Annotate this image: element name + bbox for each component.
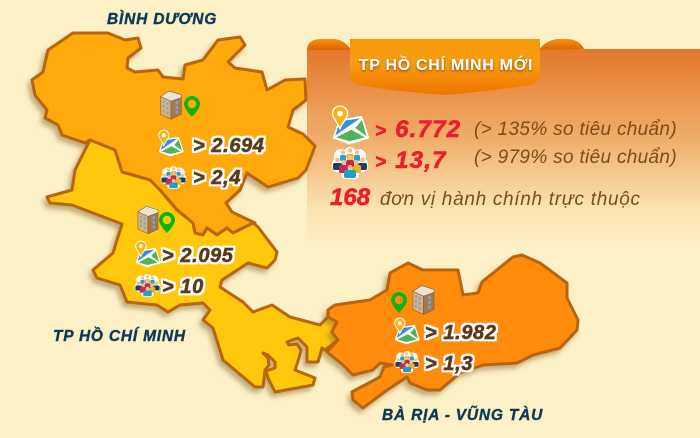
icon: green pin — [159, 212, 175, 233]
value: area: > 2.694 — [193, 135, 264, 157]
icon: area map — [159, 130, 183, 155]
stats: Bà Rịa - Vũng Tàu — [391, 286, 496, 375]
icon: area map — [136, 241, 160, 266]
icon: population — [161, 167, 186, 188]
map: Bình Dương province — [32, 33, 315, 235]
label: Bình Dương: BÌNH DƯƠNG — [107, 11, 217, 28]
map: Bà Rịa - Vũng Tàu province — [327, 255, 578, 408]
value: area: > 1.982 — [425, 322, 496, 344]
value: > 6.772 — [375, 116, 461, 143]
stats: TP Hồ Chí Minh — [135, 206, 234, 298]
map: TP Hồ Chí Minh province — [47, 140, 338, 392]
note: đơn vị hành chính trực thuộc — [380, 189, 641, 210]
icon: population — [135, 275, 160, 296]
summary: administrative units — [330, 184, 641, 211]
icon: area map — [332, 106, 368, 143]
value: 168 — [330, 184, 371, 211]
icon: area map — [395, 318, 419, 343]
ribbon heading — [350, 39, 540, 95]
panel: summary background — [307, 39, 700, 249]
heading text: TP HỒ CHÍ MINH MỚI — [359, 55, 533, 74]
label: Bà Rịa - Vũng Tàu: BÀ RỊA - VŨNG TÀU — [382, 406, 543, 424]
stats: Bình Dương — [159, 91, 264, 189]
icon: building — [138, 206, 158, 234]
summary: total area — [332, 106, 677, 143]
icon: green pin — [184, 96, 200, 117]
value: population: > 1,3 — [425, 353, 473, 375]
icon: green pin — [391, 292, 407, 313]
icon: building — [413, 286, 434, 314]
icon: building — [161, 91, 181, 119]
summary: total population — [333, 147, 677, 178]
icon: population — [333, 148, 367, 178]
icon: population — [395, 352, 419, 372]
value: population: > 10 — [162, 276, 204, 298]
label: TP Hồ Chí Minh: TP HỒ CHÍ MINH — [53, 327, 186, 345]
value: > 13,7 — [375, 147, 447, 174]
note: (> 135% so tiêu chuẩn) — [474, 119, 677, 140]
value: area: > 2.095 — [162, 245, 234, 267]
value: population: > 2,4 — [193, 167, 241, 189]
note: (> 979% so tiêu chuẩn) — [474, 147, 677, 168]
